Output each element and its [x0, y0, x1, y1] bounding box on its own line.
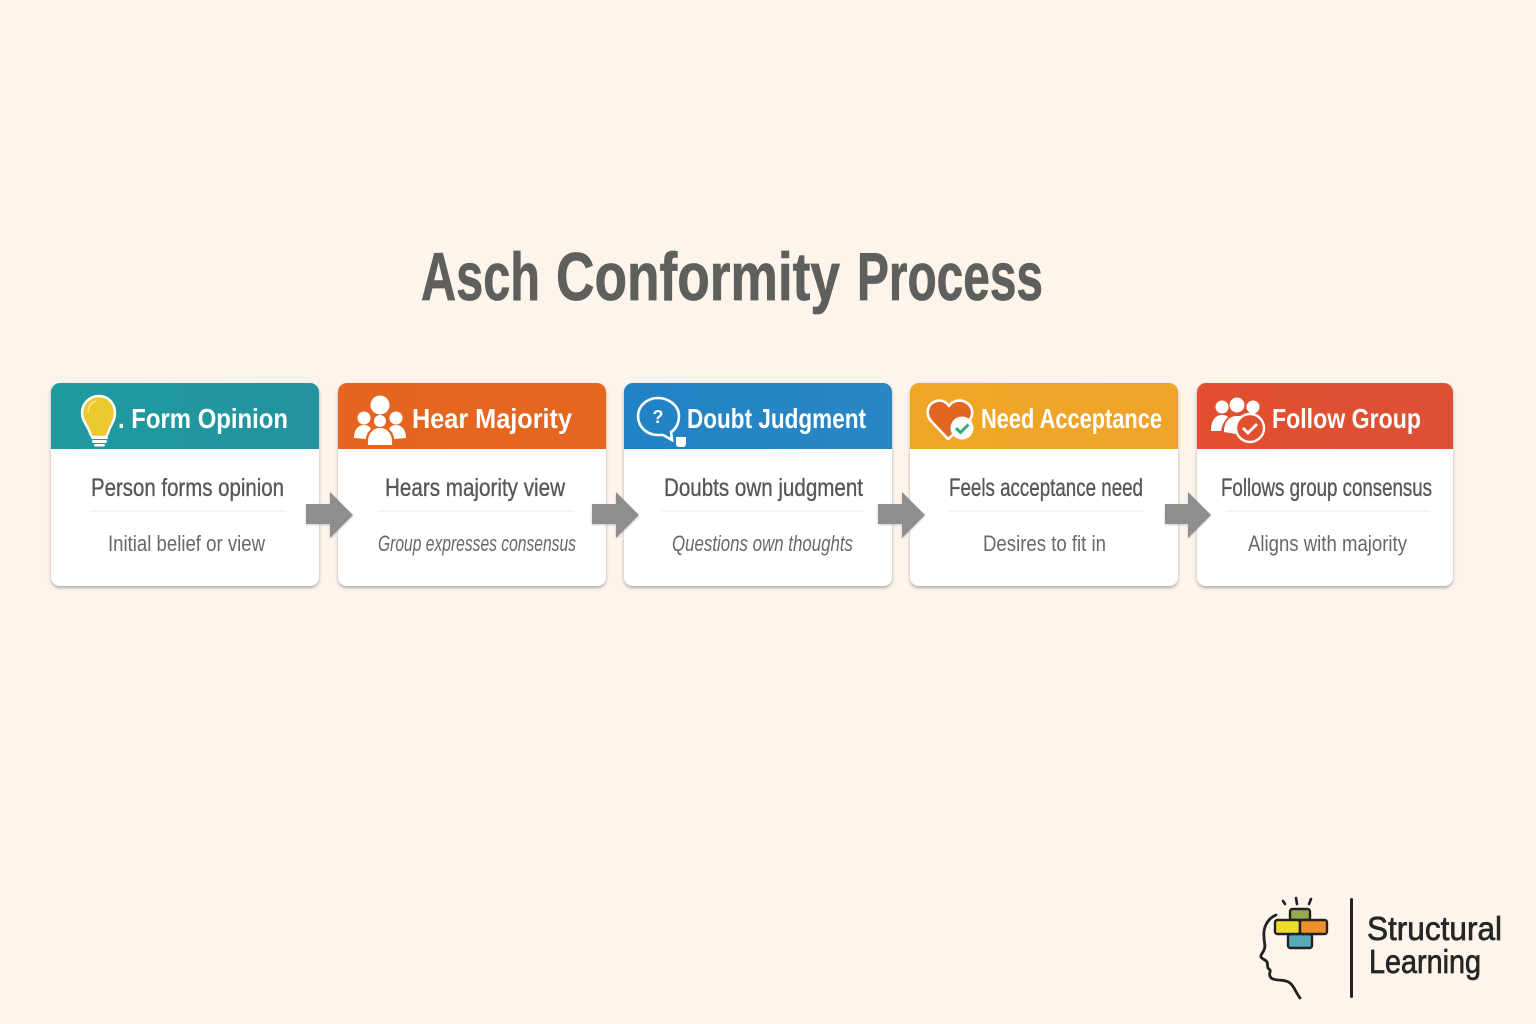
text: Hears majority view: Hears majority view	[385, 474, 566, 502]
header: Hear Majority	[338, 383, 606, 449]
icon: question speech bubble: ?	[652, 407, 664, 427]
text: Desires to fit in: Desires to fit in	[983, 531, 1106, 556]
arrow: step 4 to 5	[1165, 492, 1211, 538]
header: Doubt Judgment	[624, 383, 892, 449]
text: Group expresses consensus: Group expresses consensus	[378, 531, 576, 556]
title: Asch	[421, 239, 540, 315]
text: Questions own thoughts: Questions own thoughts	[672, 531, 853, 556]
logo: Structural Learning	[1261, 898, 1502, 998]
icon: question speech bubble	[638, 398, 686, 447]
header: Form Opinion	[51, 383, 319, 449]
heading: Follow Group: Follow Group	[1272, 403, 1421, 434]
title	[421, 239, 1043, 315]
heading: Hear Majority: Hear Majority	[412, 403, 572, 434]
text: Doubts own judgment: Doubts own judgment	[664, 474, 863, 502]
heading: Form Opinion: . Form Opinion	[118, 403, 288, 434]
text: Initial belief or view: Initial belief or view	[108, 531, 265, 556]
title: Process	[857, 239, 1043, 315]
text: Feels acceptance need: Feels acceptance need	[949, 474, 1143, 502]
panel: Hear Majority	[338, 383, 606, 586]
text: Aligns with majority: Aligns with majority	[1248, 531, 1407, 556]
arrow: step 3 to 4	[878, 492, 925, 538]
panel: Follow Group	[1197, 383, 1453, 586]
header: Need Acceptance	[910, 383, 1178, 449]
title: Conformity	[556, 239, 840, 315]
text: Learning: Learning	[1369, 943, 1481, 980]
panel: Doubt Judgment	[624, 383, 892, 586]
header: Follow Group	[1197, 383, 1453, 449]
text: Person forms opinion: Person forms opinion	[91, 474, 284, 502]
heading: Need Acceptance: Need Acceptance	[981, 403, 1162, 434]
icon: light bulb	[82, 396, 115, 446]
icon: head with blocks	[1261, 898, 1327, 998]
text: Structural: Structural	[1367, 910, 1502, 947]
panel: Form Opinion	[51, 383, 319, 586]
arrow: step 1 to 2	[306, 492, 353, 538]
text: Follows group consensus: Follows group consensus	[1221, 474, 1432, 502]
arrow: step 2 to 3	[592, 492, 639, 538]
icon: group with check	[1211, 398, 1264, 442]
heading: Doubt Judgment: Doubt Judgment	[687, 403, 866, 434]
icon: group of people	[354, 396, 406, 445]
icon: heart with check	[928, 401, 974, 440]
panel: Need Acceptance	[910, 383, 1178, 586]
